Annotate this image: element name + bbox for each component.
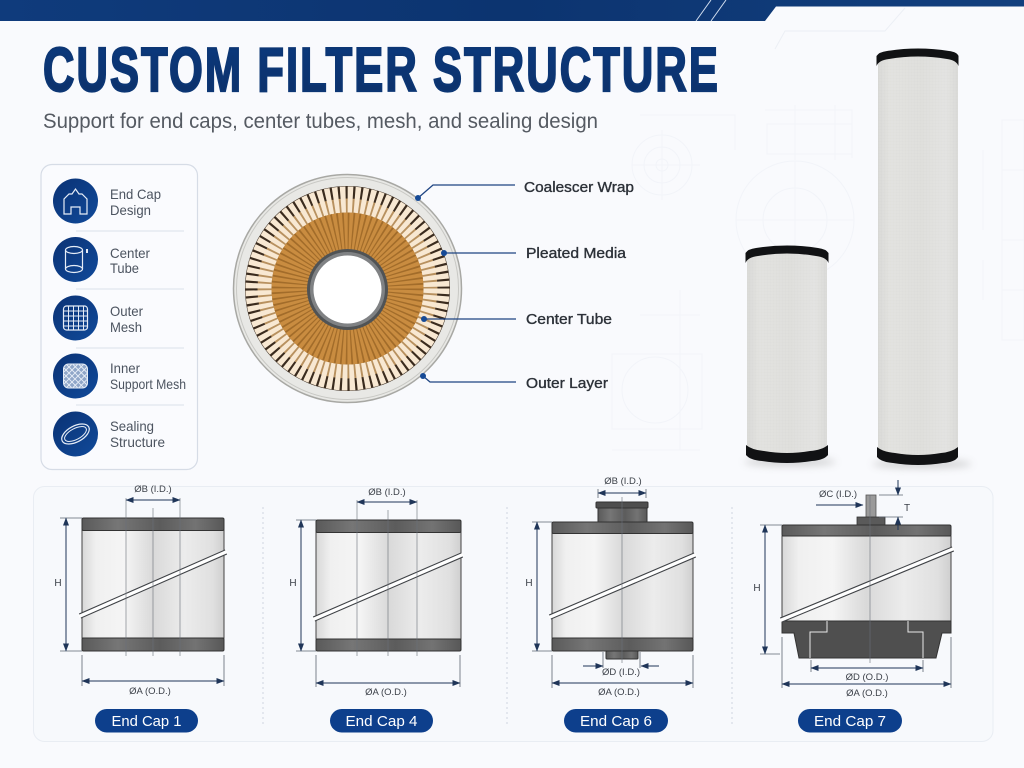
drawing: end cap 1	[54, 484, 227, 697]
label: end cap 1: End Cap 1	[112, 713, 182, 730]
callout: pleated media	[441, 246, 627, 262]
callout: coalescer wrap	[415, 180, 634, 201]
item: center tube	[53, 237, 150, 282]
drawing: end cap 6	[525, 476, 696, 698]
item: center tube: Center	[110, 245, 150, 261]
item: inner support mesh: Inner	[110, 360, 140, 376]
item: end cap design: End Cap	[110, 186, 161, 202]
faint blueprint background	[612, 105, 1024, 450]
callout: center tube: Center Tube	[526, 312, 612, 328]
callout: outer layer: Outer Layer	[526, 376, 608, 392]
drawing: end cap 1: ØB (I.D.)	[134, 484, 172, 495]
drawing: end cap 1: ØA (O.D.)	[129, 686, 171, 697]
drawing: end cap 7: H	[753, 583, 761, 594]
callout: coalescer wrap: Coalescer Wrap	[524, 180, 634, 196]
label: end cap 6	[564, 709, 668, 732]
drawing: end cap 7: ØA (O.D.)	[846, 688, 888, 699]
item: sealing structure	[53, 412, 165, 456]
label: end cap 4	[330, 709, 433, 732]
filter cross-section	[234, 174, 462, 402]
label: end cap 4: End Cap 4	[346, 713, 418, 730]
drawing: end cap 4: ØB (I.D.)	[368, 487, 406, 498]
tall filter cartridge	[872, 48, 972, 468]
subtitle: Support for end caps, center tubes, mesh, and sealing design	[43, 110, 598, 133]
drawing: end cap 7: ØC (I.D.)	[819, 489, 857, 500]
item: sealing structure: Sealing	[110, 418, 154, 434]
callout: pleated media: Pleated Media	[526, 246, 627, 262]
top banner	[0, 0, 1024, 49]
drawing: end cap 6: ØA (O.D.)	[598, 687, 640, 698]
label: end cap 7	[798, 709, 902, 732]
drawing: end cap 7: ØD (O.D.)	[846, 672, 888, 683]
item: end cap design	[53, 178, 161, 224]
item: inner support mesh	[53, 354, 186, 398]
callout: center tube	[421, 312, 612, 328]
drawing: end cap 6: ØB (I.D.)	[604, 476, 642, 487]
short filter cartridge	[744, 246, 836, 466]
item: inner support mesh: Support Mesh	[110, 376, 186, 392]
item: outer mesh: Mesh	[110, 319, 142, 335]
item: center tube: Tube	[110, 260, 139, 276]
drawing: end cap 4: ØA (O.D.)	[365, 687, 407, 698]
drawing: end cap 7	[753, 480, 954, 699]
item: sealing structure: Structure	[110, 434, 165, 450]
drawing: end cap 7: T	[904, 503, 910, 514]
drawing: end cap 6: ØD (I.D.)	[602, 667, 640, 678]
item: outer mesh: Outer	[110, 303, 143, 319]
panel: end cap drawings	[34, 476, 993, 742]
drawing: end cap 4: H	[289, 578, 297, 589]
callout: outer layer	[420, 373, 608, 392]
item: end cap design: Design	[110, 202, 151, 218]
drawing: end cap 6: H	[525, 578, 533, 589]
drawing: end cap 1: H	[54, 578, 62, 589]
item: outer mesh	[53, 296, 143, 340]
panel: feature list	[41, 164, 198, 470]
title: CUSTOM FILTER STRUCTURE	[43, 36, 720, 105]
label: end cap 6: End Cap 6	[580, 713, 652, 730]
label: end cap 7: End Cap 7	[814, 713, 886, 730]
label: end cap 1	[95, 709, 198, 732]
drawing: end cap 4	[289, 487, 463, 698]
